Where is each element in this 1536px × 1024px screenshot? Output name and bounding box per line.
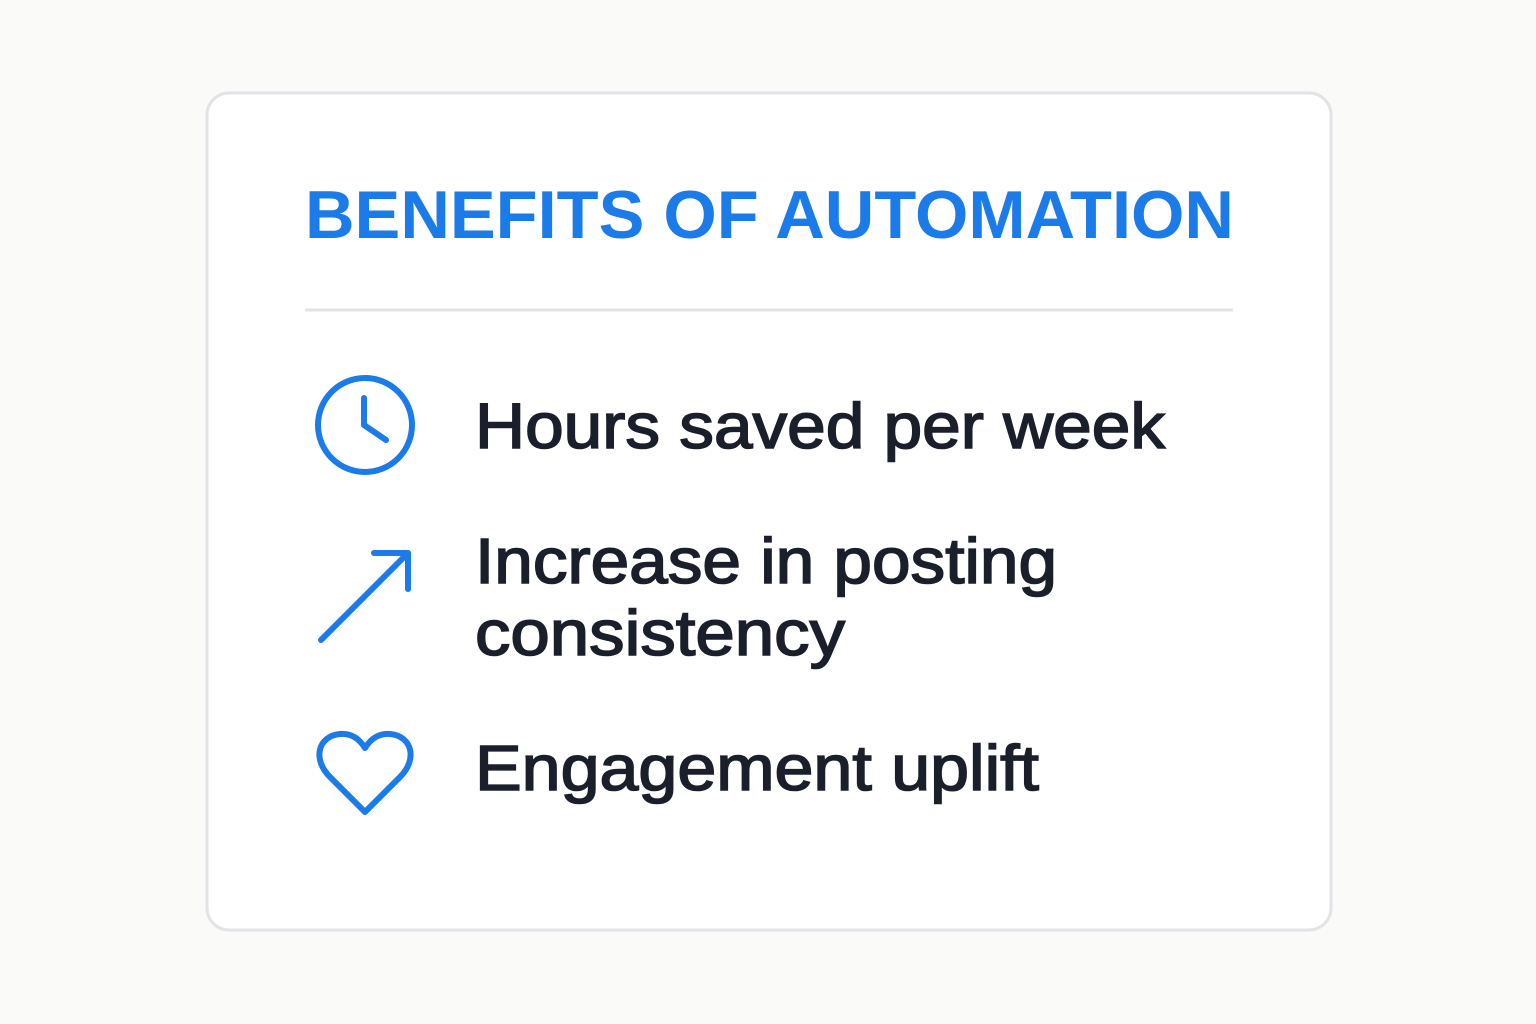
icon: arrow up-right	[321, 553, 408, 640]
text: engagement uplift: Engagement uplift	[475, 732, 1039, 804]
text: posting consistency: consistency	[475, 597, 845, 669]
panel: benefits card	[207, 93, 1331, 930]
icon: clock	[318, 378, 412, 472]
text: hours saved: Hours saved per week	[475, 390, 1166, 462]
icon: heart	[319, 734, 411, 812]
title: BENEFITS OF AUTOMATION	[305, 177, 1234, 253]
text: posting consistency: Increase in posting	[475, 525, 1057, 597]
